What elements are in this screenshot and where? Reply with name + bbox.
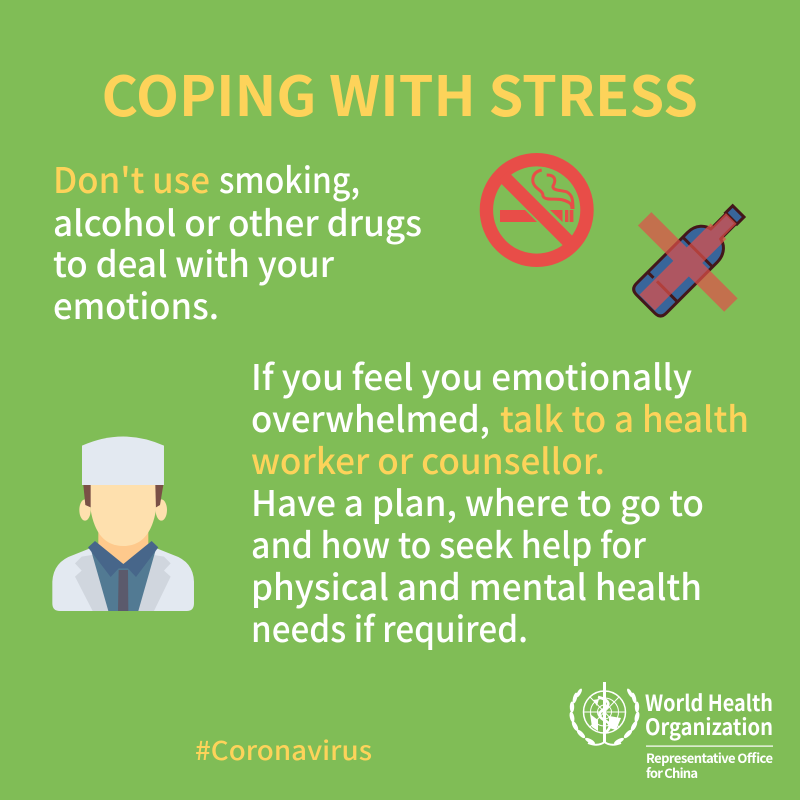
text block: don't use substances bbox=[53, 153, 422, 330]
WHO logo: Representative Office bbox=[646, 748, 773, 767]
text block: seek help bbox=[251, 350, 749, 653]
text block: seek help: Have a plan, where to go to bbox=[251, 476, 704, 527]
WHO logo bbox=[569, 682, 773, 782]
text block: don't use substances: alcohol or other drugs bbox=[53, 196, 422, 247]
text block: seek help: talk to a health bbox=[500, 392, 749, 443]
text block: don't use substances: smoking, bbox=[219, 153, 360, 204]
WHO logo: Organization bbox=[645, 710, 773, 742]
icon: no smoking sign bbox=[486, 160, 587, 260]
text block: don't use substances: Don't use bbox=[53, 153, 210, 204]
WHO logo: for China bbox=[646, 763, 698, 782]
title: COPING WITH STRESS bbox=[102, 52, 698, 132]
text block: seek help: and how to seek help for bbox=[251, 518, 647, 569]
text block: seek help: physical and mental health bbox=[251, 560, 702, 611]
text block: seek help: needs if required. bbox=[251, 602, 528, 653]
text block: seek help: worker or counsellor. bbox=[251, 434, 605, 485]
icon: WHO emblem bbox=[569, 682, 640, 745]
hashtag: #Coronavirus bbox=[195, 731, 372, 768]
icon: crossed-out bottle bbox=[603, 168, 781, 347]
text block: don't use substances: emotions. bbox=[53, 279, 219, 330]
icon: health worker bbox=[52, 436, 194, 611]
WHO logo: World Health bbox=[645, 686, 773, 718]
text block: seek help: overwhelmed, bbox=[251, 392, 490, 443]
text block: don't use substances: to deal with your bbox=[53, 237, 335, 288]
text block: seek help: If you feel you emotionally bbox=[251, 350, 692, 401]
